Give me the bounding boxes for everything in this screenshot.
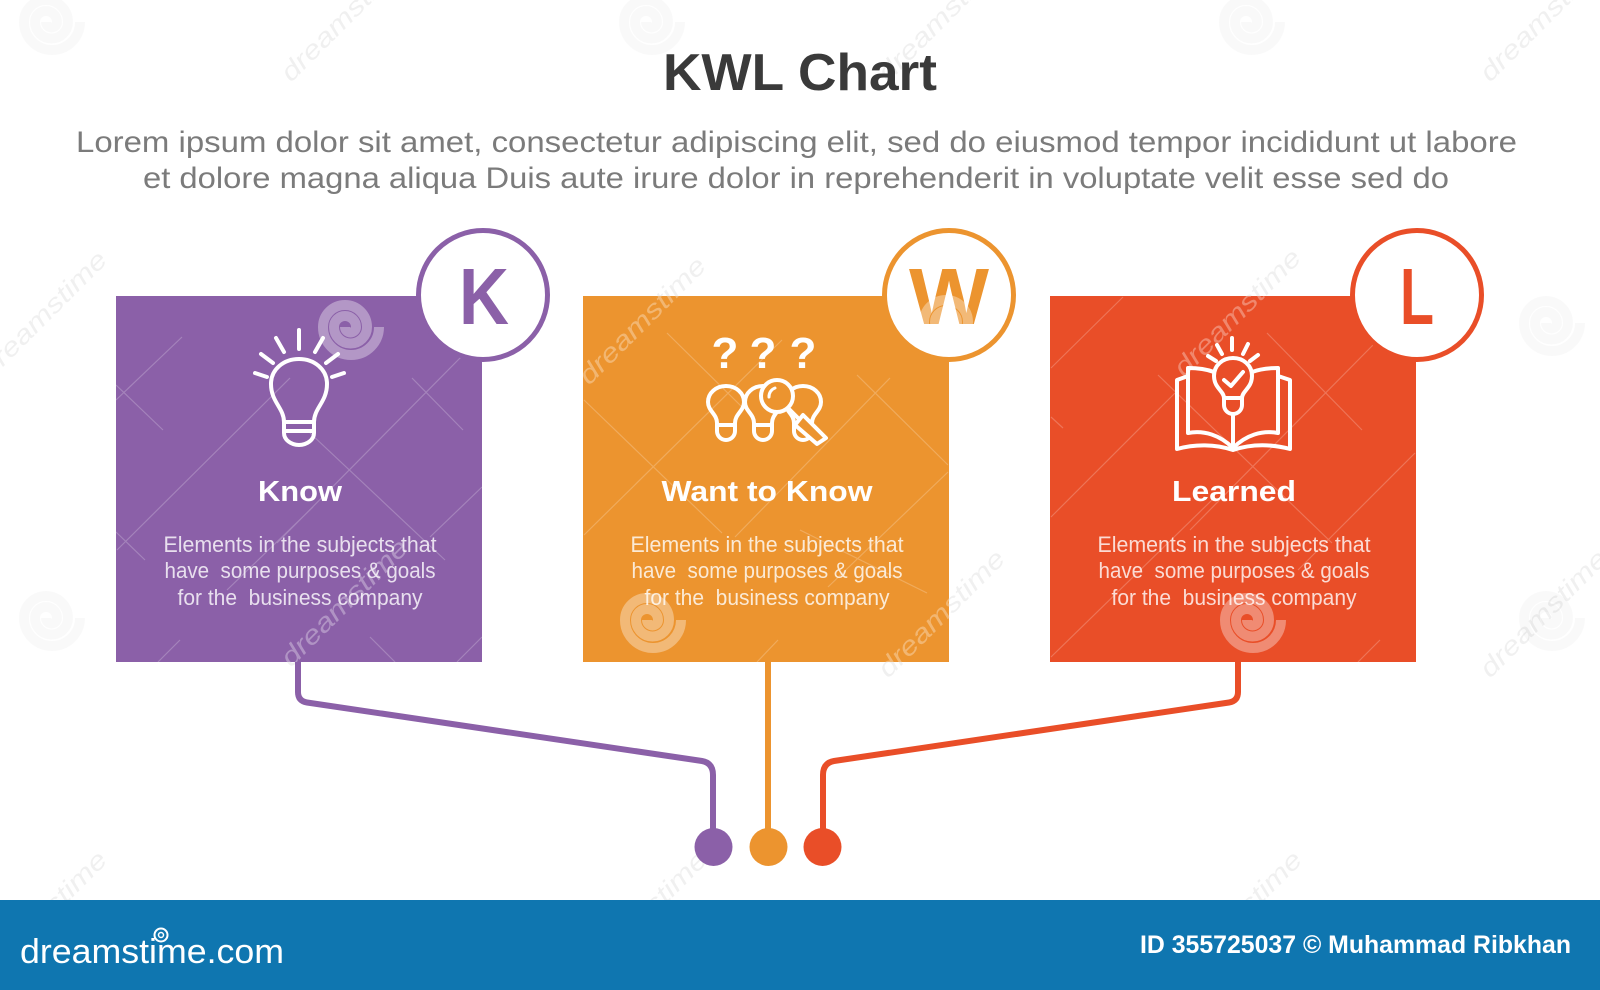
badge: W: [884, 230, 1014, 360]
icon: bulbs with question marks and magnifier: ?: [790, 329, 816, 378]
badge: L: L: [1400, 252, 1434, 341]
watermark swirls and diagonal marks: [285, 295, 1286, 662]
text block: Want to Know description: have some purposes & goals: [632, 558, 902, 583]
heading: Want to Know: Want to Know: [662, 476, 873, 508]
background watermark text: dreamstime: [1168, 844, 1308, 984]
connector: Know line to purple dot: [298, 660, 732, 866]
panel: Know: [116, 296, 482, 662]
background watermark text: dreamstime: [573, 844, 713, 984]
subtitle text block: et dolore magna aliqua Duis aute irure dolor in reprehenderit in voluptate velit esse sed do: [143, 162, 1449, 195]
image credit: ID 355725037 © Muhammad Ribkhan: [1140, 931, 1571, 959]
text block: Want to Know description: [630, 532, 904, 610]
text block: Learned description: have some purposes & goals: [1098, 558, 1370, 583]
watermark swirl on W badge: [924, 300, 980, 350]
icon: open book with bulb: [1177, 338, 1290, 450]
watermark swirls and diagonal marks: dreamstime: [1167, 242, 1307, 382]
icon: bulbs with question marks and magnifier: ?: [750, 329, 776, 378]
text block: Want to Know description: Elements in the subjects that: [630, 532, 904, 557]
connector: Want to Know line to orange dot: [750, 660, 788, 866]
background watermark text: dreamstime: [871, 543, 1011, 683]
icon: light bulb: [255, 330, 344, 445]
panel: Want to Know: [583, 296, 949, 662]
text block: Know description: for the business company: [178, 585, 422, 610]
text block: Learned description: [1098, 532, 1370, 610]
background watermark text: dreamstime: [572, 250, 712, 390]
badge: W: W: [909, 252, 990, 341]
heading: Learned: Learned: [1172, 476, 1296, 508]
background watermark text: dreamstime: [1473, 543, 1600, 683]
footer band: [0, 900, 1600, 990]
subtitle text block: [76, 126, 1517, 195]
watermark swirls and diagonal marks: dreamstime: [871, 543, 1011, 683]
icon: bulbs with question marks and magnifier: [708, 329, 826, 444]
text block: Learned description: Elements in the subjects that: [1098, 532, 1370, 557]
icon: bulbs with question marks and magnifier: ?: [712, 329, 738, 378]
text block: Know description: [164, 532, 436, 610]
text block: Know description: Elements in the subjects that: [164, 532, 436, 557]
title: KWL Chart: [663, 44, 937, 102]
text block: Learned description: for the business company: [1112, 585, 1356, 610]
badge: K: [418, 230, 548, 360]
background watermark text: dreamstime: [274, 532, 414, 672]
connector: Learned line to red dot: [804, 660, 1238, 866]
badge: L: [1352, 230, 1482, 360]
heading: Know: Know: [258, 476, 342, 508]
subtitle text block: Lorem ipsum dolor sit amet, consectetur adipiscing elit, sed do eiusmod tempor incididunt ut labore: [76, 126, 1517, 159]
watermark swirls and diagonal marks: dreamstime: [572, 250, 712, 390]
background watermark text: dreamstime: [1167, 242, 1307, 382]
text block: Want to Know description: for the business company: [644, 585, 890, 610]
panel: Learned: [1050, 296, 1416, 662]
text block: Know description: have some purposes & goals: [164, 558, 436, 583]
logo: dreamstime.com: dreamstime.com: [20, 933, 284, 971]
watermark swirls and diagonal marks: dreamstime: [274, 532, 414, 672]
badge: K: K: [459, 252, 509, 341]
